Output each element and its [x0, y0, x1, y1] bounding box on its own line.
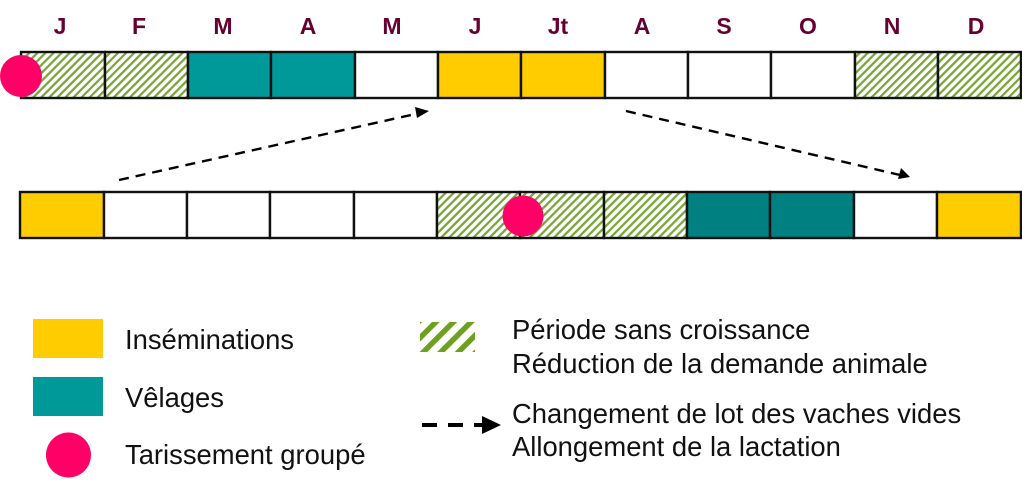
marker: grouped drying-off, bottom row	[502, 196, 544, 236]
month labels	[54, 13, 984, 39]
legend: inseminations: Inséminations	[125, 324, 294, 355]
month labels: J	[54, 13, 66, 39]
legend: inseminations	[33, 319, 294, 358]
month labels: D	[968, 13, 984, 39]
month labels: N	[884, 13, 900, 39]
calendar row: shifted schedule	[20, 192, 1021, 238]
calendar row: current schedule	[21, 52, 1021, 98]
arrow: shift to bottom row start	[119, 107, 429, 180]
month labels: Jt	[548, 13, 569, 39]
month labels: J	[469, 13, 481, 39]
legend: dashed arrow: Changement de lot des vaches vides	[512, 398, 961, 429]
legend: calvings	[33, 377, 224, 416]
legend: calvings: Vêlages	[125, 382, 224, 413]
legend: period without growth: Période sans croissance	[512, 314, 810, 345]
month labels: S	[716, 13, 732, 39]
legend: period without growth	[420, 314, 928, 379]
month labels: M	[213, 13, 233, 39]
legend: dashed arrow: Allongement de la lactation	[512, 431, 841, 462]
marker: grouped drying-off, top row	[0, 55, 42, 97]
month labels: A	[634, 13, 650, 39]
legend: period without growth: Réduction de la demande animale	[512, 348, 928, 379]
legend: grouped drying-off: Tarissement groupé	[125, 439, 366, 470]
arrow: shift to bottom row end	[626, 111, 910, 179]
month labels: A	[300, 13, 316, 39]
legend: dashed arrow	[422, 398, 961, 462]
month labels: O	[799, 13, 817, 39]
month labels: F	[132, 13, 146, 39]
month labels: M	[382, 13, 402, 39]
legend: grouped drying-off	[46, 432, 366, 478]
